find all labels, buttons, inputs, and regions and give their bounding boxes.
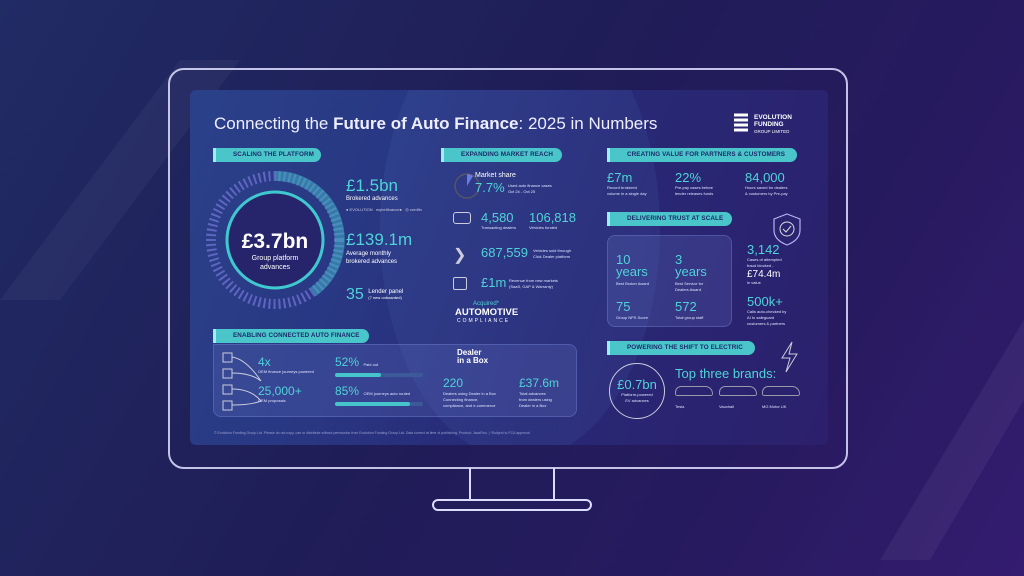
stat: monthly: [346, 230, 412, 265]
automotive compliance logo: COMPLIANCE: [457, 318, 510, 324]
icons: chips: [222, 352, 262, 410]
icon: shield: [773, 213, 801, 246]
main stat: Group platform: [252, 255, 298, 262]
dealer in a box: 220: [443, 376, 463, 390]
heading: EXPANDING MARKET REACH: [461, 151, 553, 158]
panel: expanding market reach: 7.7%: [475, 180, 505, 195]
stats: volume in a single day: [607, 191, 647, 196]
cars: MG Motor UK: [762, 404, 786, 409]
stat: brokered: Brokered advances: [346, 196, 398, 202]
heading: DELIVERING TRUST AT SCALE: [627, 215, 723, 222]
main stat: advances: [260, 264, 290, 271]
revenue: [453, 275, 558, 290]
dealer in a box: Connecting finance,: [443, 397, 478, 402]
heading: [441, 148, 562, 162]
awards box: Best Broker Award: [616, 281, 649, 286]
panel: expanding market reach: Revenue from new markets: [509, 278, 558, 283]
vehicles sold: [453, 245, 571, 264]
panel: creating value: Hours saved for dealers: [745, 185, 787, 190]
fraud stats: £74.4m: [747, 269, 780, 280]
heading: [607, 341, 755, 355]
panel: creating value: 22%: [675, 170, 701, 185]
dealer in a box: Dealer: [457, 348, 481, 357]
fraud stats: [747, 242, 786, 326]
logo: [734, 114, 792, 134]
awards box: Dealers Award: [675, 287, 701, 292]
screen: [190, 90, 828, 445]
stat: brokered: [346, 176, 422, 212]
awards box: years: [616, 264, 648, 279]
panel: scaling the platform: [206, 148, 422, 309]
panel: expanding market reach: Used auto finance cases: [508, 183, 552, 188]
dealer in a box: Dealers using Dealer in a Box: [443, 391, 496, 396]
dealers: [453, 210, 576, 230]
panel: expanding market reach: Vehicles funded: [529, 225, 557, 230]
dealer in a box: [443, 348, 559, 408]
monitor stand: [432, 468, 592, 511]
icon: lightning: [781, 342, 798, 372]
stats left: [258, 355, 314, 374]
dealer in a box: Dealer in a Box: [519, 403, 546, 408]
awards box: 3: [675, 252, 682, 267]
stat: monthly: Average monthly: [346, 251, 391, 257]
fraud stats: 3,142: [747, 242, 780, 257]
panel: enabling connected auto finance: OEM proposals: [258, 398, 286, 403]
heading: CREATING VALUE FOR PARTNERS & CUSTOMERS: [627, 151, 785, 158]
dealer in a box: £37.6m: [519, 376, 559, 390]
panel: enabling connected auto finance: 25,000+: [258, 384, 302, 398]
panel: creating value: & customers by Pre-pay: [745, 191, 788, 196]
awards box: Group NPS Score: [616, 315, 648, 320]
panel: expanding market reach: 687,559: [481, 245, 528, 260]
automotive compliance logo: AUTOMOTIVE: [455, 307, 518, 318]
stat: brokered: ● EVOLUTION mybelfinance● ◎ credfin: [346, 207, 422, 212]
panel: expanding market reach: Vehicles sold through: [533, 248, 571, 253]
panel: expanding market reach: 4,580: [481, 210, 514, 225]
panel: expanding market reach: ❯: [453, 247, 466, 264]
stats left: 4x: [258, 355, 271, 369]
stat: lender panel: Lender panel: [368, 289, 403, 295]
footer disclaimer: © Evolution Funding Group Ltd. Please do not copy, use or distribute without permission from Evolution Funding Group Ltd. Data correct at time of publishing. Product: JacaRoo. | *Subject to FCA approval: [214, 431, 530, 435]
panel: expanding market reach: Oct 24 - Oct 25: [508, 189, 535, 194]
panel: creating value: lender releases funds: [675, 191, 713, 196]
progress bars: 52% Paid out: [335, 355, 378, 369]
dealer in a box: from dealers using: [519, 397, 552, 402]
title: Connecting the Future of Auto Finance: 2025 in Numbers: [214, 114, 657, 133]
top three brands: Top three brands:: [675, 366, 776, 381]
cars: Tesla: [675, 404, 684, 409]
EV circle stat: EV advances: [625, 398, 649, 403]
panel: enabling connected auto finance: [213, 329, 577, 417]
panel: creating value: Pre-pay cases before: [675, 185, 713, 190]
stats: [607, 170, 647, 196]
dealer in a box: compliance, and e-commerce: [443, 403, 495, 408]
stat: lender panel: [346, 286, 403, 303]
awards box: 572: [675, 299, 697, 314]
fraud stats: 500k+: [747, 294, 783, 309]
heading: ENABLING CONNECTED AUTO FINANCE: [233, 332, 360, 339]
panel: enabling connected auto finance: 85% OEM journeys auto routed: [335, 384, 410, 398]
main stat: £3.7bn: [242, 230, 308, 253]
dealer in a box: in a Box: [457, 356, 488, 365]
stat: brokered: £1.5bn: [346, 176, 398, 195]
panel: delivering trust: [607, 212, 801, 327]
automotive compliance logo: Acquired*: [473, 301, 499, 307]
awards box: Best Service for: [675, 281, 703, 286]
panel: creating value: 84,000: [745, 170, 785, 185]
cars: Vauxhall: [719, 404, 734, 409]
fraud stats: Cases of attempted: [747, 257, 782, 262]
fraud stats: fraud blocked -: [747, 263, 773, 268]
stat: monthly: £139.1m: [346, 230, 412, 249]
panel: expanding market reach: Click Dealer platform: [533, 254, 570, 259]
panel: powering the shift to electric: [607, 341, 800, 419]
stat: monthly: brokered advances: [346, 259, 397, 265]
panel: expanding market reach: (SaaS, GAP & Warranty): [509, 284, 553, 289]
stats: £7m: [607, 170, 632, 185]
market share: [454, 172, 552, 199]
awards box: years: [675, 264, 707, 279]
heading: [213, 148, 321, 162]
fraud stats: in value: [747, 280, 761, 285]
main stat: [242, 230, 308, 271]
fraud stats: customers & partners: [747, 321, 785, 326]
stat: lender panel: 35: [346, 286, 364, 303]
awards box: Total group staff: [675, 315, 703, 320]
panel: expanding market reach: 106,818: [529, 210, 576, 225]
awards box: 75: [616, 299, 630, 314]
panel: expanding market reach: £1m: [481, 275, 506, 290]
awards box: 10: [616, 252, 630, 267]
cars: [675, 386, 800, 409]
EV circle stat: Platform-powered: [621, 392, 653, 397]
fraud stats: Calls auto-checked by: [747, 309, 786, 314]
fraud stats: AI to safeguard: [747, 315, 774, 320]
monitor frame: [168, 68, 848, 469]
dealer in a box: Total advances: [519, 391, 546, 396]
awards box: [607, 235, 732, 327]
automotive compliance logo: [455, 300, 518, 324]
progress bars: [335, 355, 423, 377]
heading: [213, 329, 369, 343]
panel: expanding market reach: Market share: [475, 172, 516, 179]
EV circle stat: [609, 363, 665, 419]
ring chart: [206, 171, 345, 309]
EV circle stat: £0.7bn: [617, 377, 657, 392]
stat: lender panel: (7 new onboarded): [368, 295, 402, 300]
stats left: OEM finance journeys powered: [258, 369, 314, 374]
panel: expanding market reach: [441, 148, 576, 324]
heading: POWERING THE SHIFT TO ELECTRIC: [627, 344, 743, 351]
heading: [607, 148, 797, 162]
logo: EVOLUTION FUNDING: [754, 114, 792, 128]
logo: GROUP LIMITED: [754, 129, 789, 134]
panel: expanding market reach: Transacting dealers: [481, 225, 516, 230]
heading: SCALING THE PLATFORM: [233, 151, 314, 158]
stats: Record brokered: [607, 185, 637, 190]
heading: [607, 212, 732, 226]
panel: creating value: [607, 148, 797, 196]
